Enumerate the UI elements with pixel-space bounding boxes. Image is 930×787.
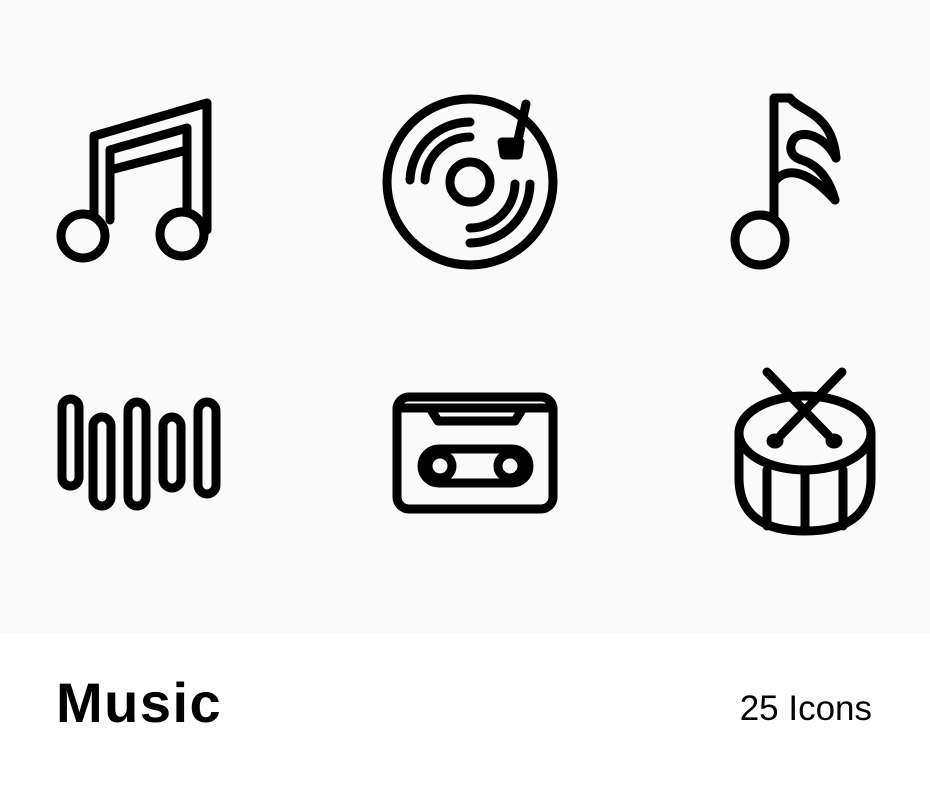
icon: cassette (397, 397, 553, 509)
icon: sound wave (62, 399, 216, 506)
icon: vinyl record (387, 99, 553, 265)
title: Music (56, 671, 222, 734)
icon: sixteenth note (735, 98, 836, 265)
icon: drum (739, 372, 871, 531)
icon count: 25 Icons (740, 689, 872, 728)
icon: beamed notes (61, 103, 207, 258)
